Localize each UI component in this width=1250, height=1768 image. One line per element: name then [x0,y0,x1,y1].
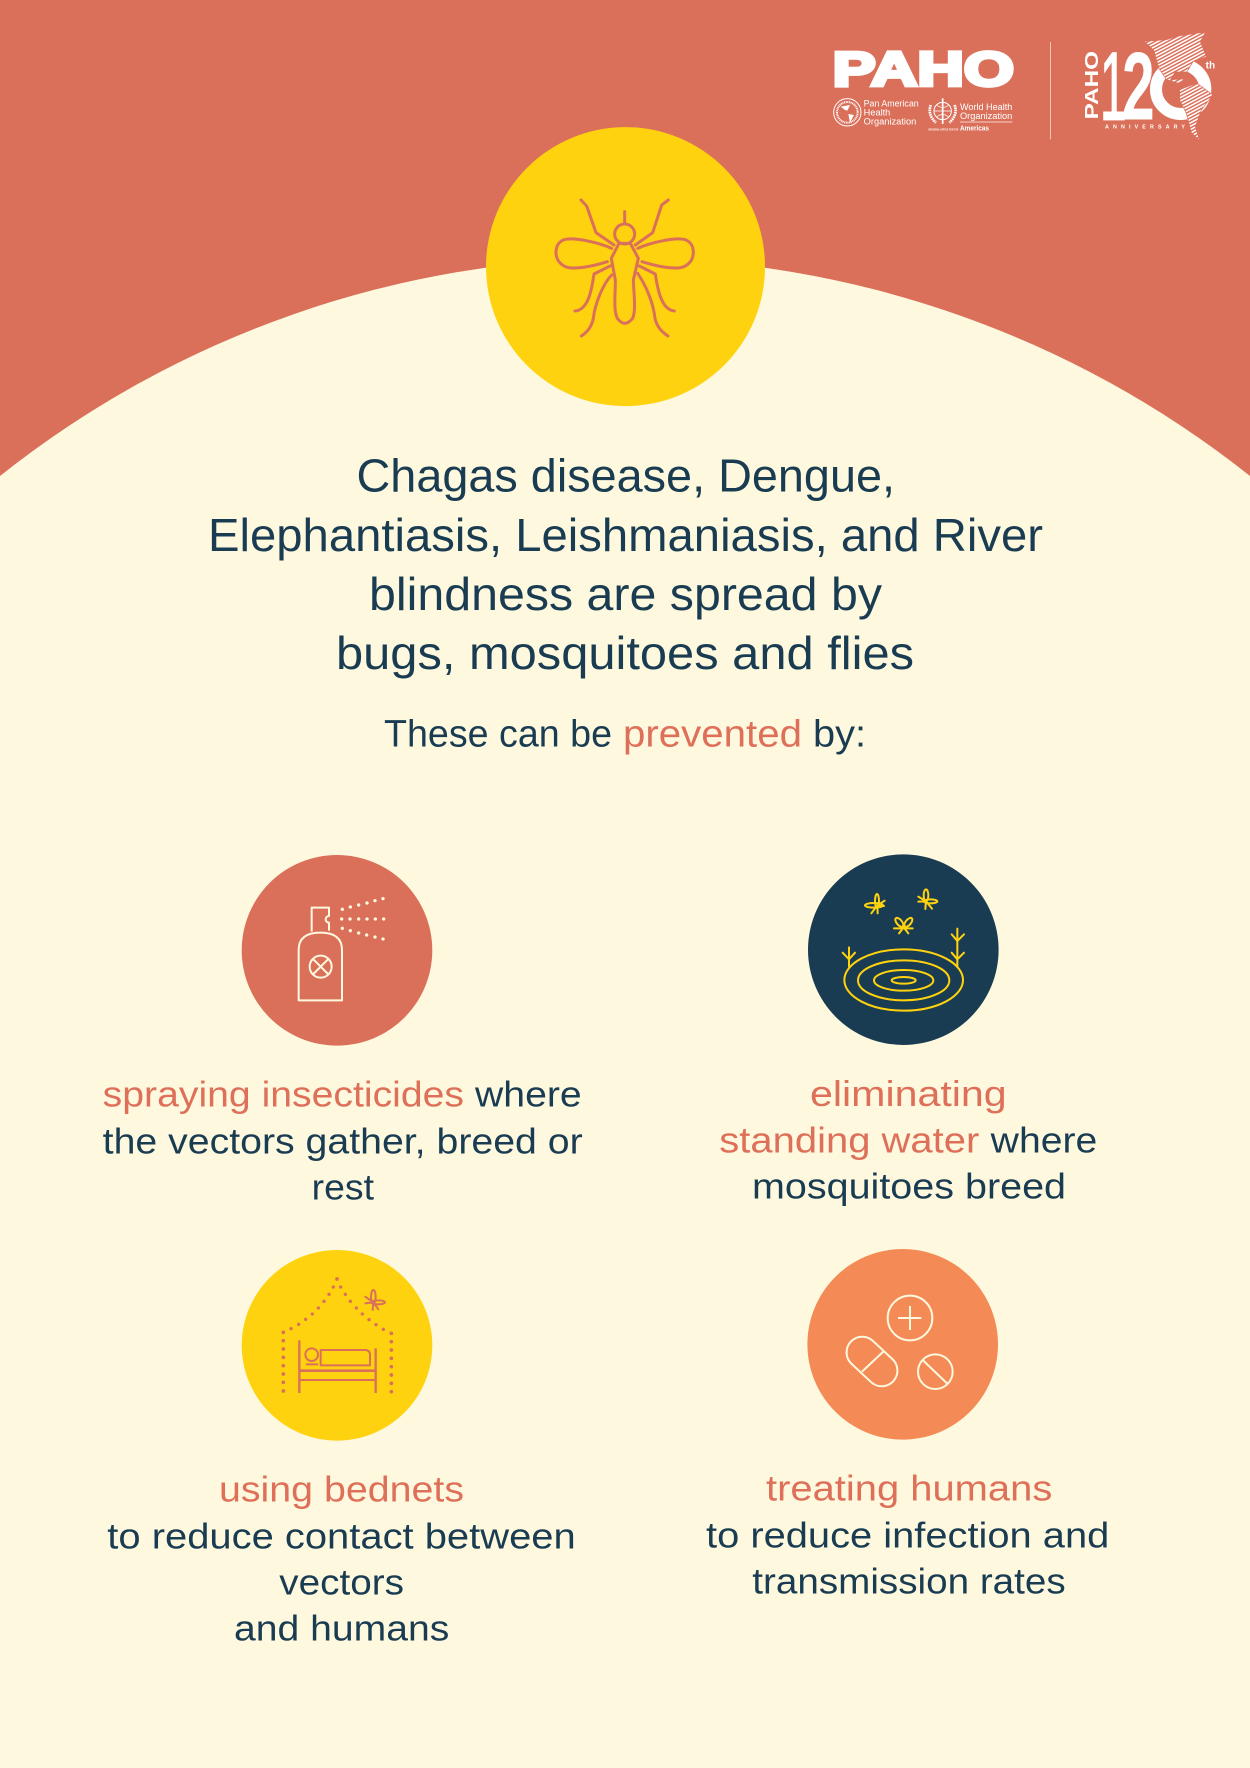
text: spraying insecticides: the vectors gather, breed or [103,1120,583,1161]
text: using bednets [107,1469,576,1649]
text: eliminating standing water: standing water [719,1120,979,1161]
120th anniversary logo: th [1206,60,1215,71]
icon: bed under net [242,1250,432,1441]
World Health Organization name: REGIONAL OFFICE FOR THE [928,127,958,131]
text: eliminating standing water: where [990,1120,1097,1161]
World Health Organization name: Americas [960,124,989,133]
Pan American Health Organization name: Organization [864,116,916,126]
PAHO emblem [834,99,861,126]
subheading [384,714,866,756]
text: spraying insecticides [103,1074,583,1207]
panel: treating humans [706,1249,1109,1601]
text: treating humans: transmission rates [752,1560,1066,1601]
headline: Elephantiasis, Leishmaniasis, and River [208,509,1043,561]
icon: mosquito in yellow circle [486,127,765,406]
text: treating humans [706,1468,1109,1601]
text: eliminating standing water: eliminating [810,1073,1007,1114]
logos: PAHO and 120th anniversary [833,32,1215,140]
headline: blindness are spread by [369,568,882,620]
text: eliminating standing water [719,1073,1097,1206]
text: spraying insecticides: spraying insecticides [103,1074,464,1115]
text: eliminating standing water: mosquitoes breed [752,1165,1066,1206]
text: using bednets: vectors [279,1561,404,1602]
icon: standing water with flies [808,854,999,1045]
Pan American Health Organization name [864,99,919,126]
120th anniversary logo: 1 [1100,32,1127,140]
120th anniversary logo: PAHO [1081,51,1102,119]
120th anniversary logo: 2 [1122,32,1155,140]
text: treating humans: to reduce infection and [706,1515,1109,1556]
World Health Organization name: World Health [960,102,1012,112]
text: using bednets: using bednets [219,1469,464,1510]
Pan American Health Organization name: Health [864,107,890,117]
icon: spray bottle [242,855,432,1046]
subheading: These can be [384,714,612,756]
subheading: by: [813,714,866,756]
WHO emblem [930,98,956,124]
Pan American Health Organization name: Pan American [864,99,919,109]
120th anniversary logo [1081,32,1215,140]
panel: spraying insecticides [103,855,583,1207]
120th anniversary logo: ANNIVERSARY [1105,124,1185,130]
headline: bugs, mosquitoes and flies [336,627,914,679]
headline: Chagas disease, Dengue, [356,450,895,502]
subheading: prevented [623,714,802,756]
panel: using bednets [107,1250,576,1649]
text: using bednets: to reduce contact between [107,1515,576,1556]
icon: pills [807,1249,998,1440]
World Health Organization name: Organization [960,111,1012,121]
text: treating humans: treating humans [766,1468,1052,1509]
text: spraying insecticides: rest [312,1166,374,1207]
World Health Organization name [928,102,1012,133]
panel: eliminating standing water [719,854,1097,1206]
PAHO wordmark: PAHO [833,43,1014,97]
headline [208,450,1043,679]
text: spraying insecticides: where [474,1074,582,1115]
text: using bednets: and humans [234,1608,449,1649]
